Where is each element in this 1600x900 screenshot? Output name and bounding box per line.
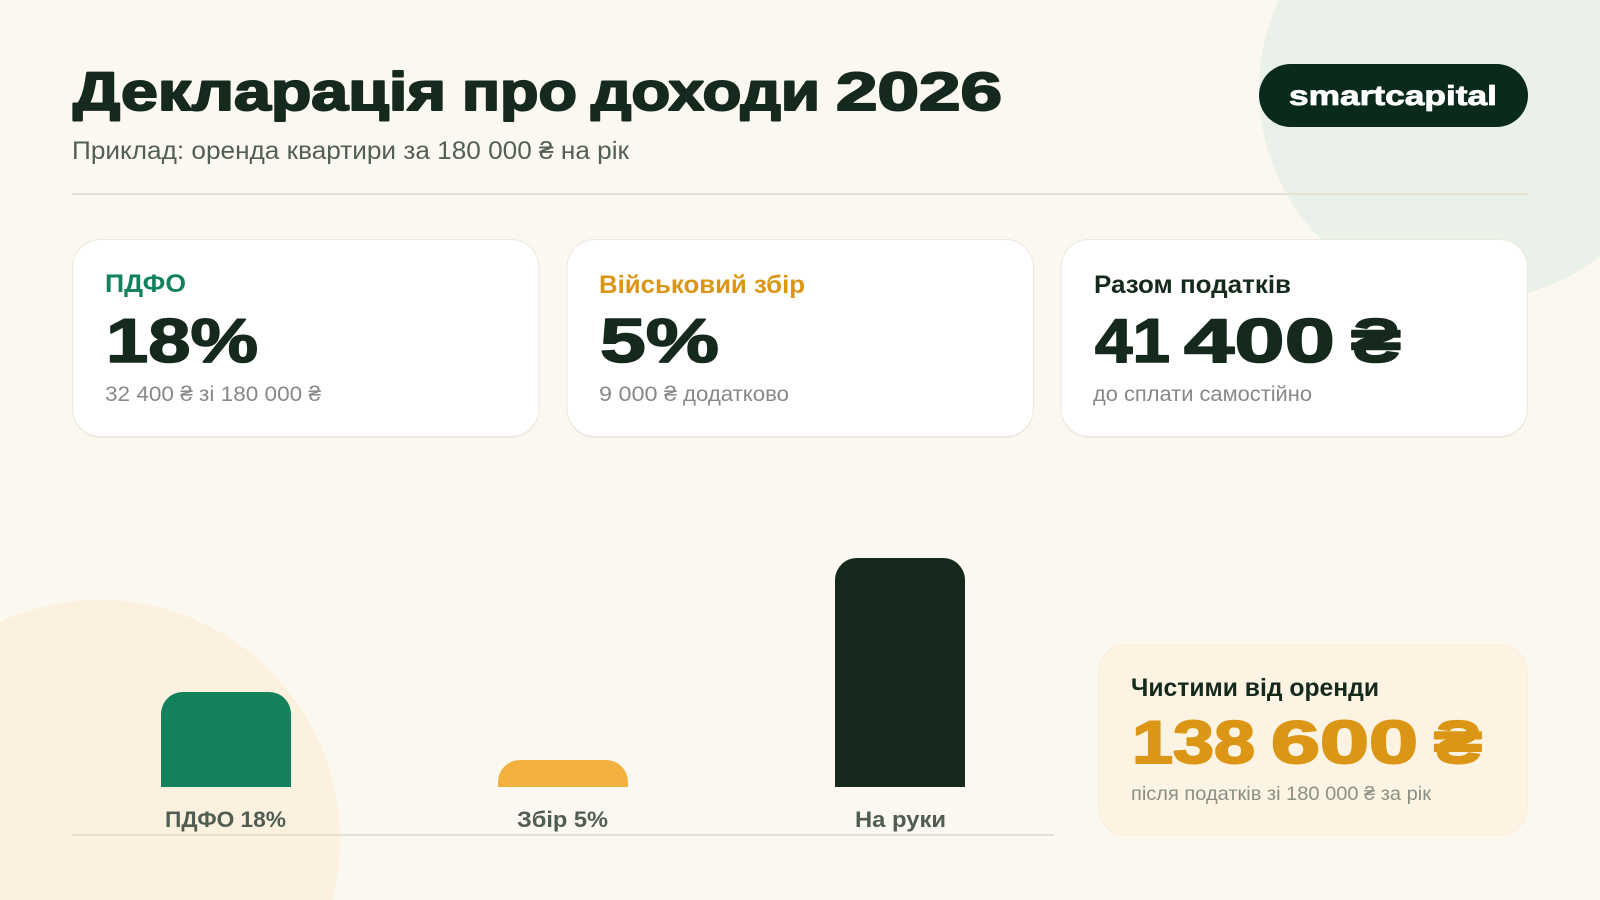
bar label: На руки: На руки bbox=[855, 807, 946, 832]
note: до сплати: до сплати самостійно bbox=[1093, 382, 1312, 406]
value: 138 600: ₴ bbox=[1434, 709, 1482, 776]
note: 9 000: 9 000 ₴ bbox=[599, 382, 677, 406]
label: Військовий збір: Військовий збір bbox=[599, 271, 805, 299]
note: після податків: після податків зі 180 000 ₴ за рік bbox=[1131, 783, 1431, 805]
label: Чистими від оренди: Чистими від оренди bbox=[1131, 674, 1379, 702]
note: 9 000: додатково bbox=[683, 382, 789, 406]
value: 5%: 5% bbox=[600, 307, 719, 376]
value: 138 600 bbox=[1132, 709, 1482, 776]
bar: ПДФО 18% bbox=[161, 692, 291, 787]
logo pill bbox=[1259, 64, 1528, 127]
bar: На руки bbox=[835, 558, 965, 787]
bar label: Збір 5%: Збір 5% bbox=[517, 807, 608, 832]
value: 41 400: 41 bbox=[1095, 307, 1170, 376]
bar label: ПДФО 18%: ПДФО 18% bbox=[165, 807, 286, 832]
note: 32 400: 32 400 ₴ зі 180 000 ₴ bbox=[105, 382, 321, 406]
bar: Збір 5% bbox=[498, 760, 628, 787]
value: 41 400 bbox=[1095, 307, 1401, 376]
subtitle: Приклад: оренда квартири за 180 000 ₴ на рік bbox=[72, 137, 630, 165]
title: Декларація bbox=[73, 62, 446, 122]
panel: Разом податків bbox=[1061, 240, 1528, 438]
panel: ПДФО bbox=[72, 240, 539, 438]
label: ПДФО: ПДФО bbox=[105, 270, 186, 298]
title bbox=[73, 62, 1002, 122]
value: 41 400: ₴ bbox=[1351, 307, 1401, 376]
panel: Чистими від оренди bbox=[1098, 644, 1528, 836]
title: 2026 bbox=[836, 62, 1002, 122]
value: 138 600: 600 bbox=[1271, 709, 1418, 776]
panel: Військовий збір bbox=[567, 240, 1034, 438]
note: 9 000 bbox=[599, 382, 789, 406]
title: доходи bbox=[591, 62, 820, 122]
decorative circle: bottom left bbox=[0, 600, 340, 900]
value: 41 400: 400 bbox=[1184, 307, 1335, 376]
label: Разом податків: Разом податків bbox=[1094, 271, 1291, 299]
value: 18%: 18% bbox=[106, 307, 258, 376]
value: 138 600: 138 bbox=[1132, 709, 1255, 776]
decorative circle: top right bbox=[1259, 0, 1600, 301]
logo pill: smartcapital bbox=[1289, 80, 1497, 111]
title: про bbox=[462, 62, 577, 122]
bar chart bbox=[72, 558, 1054, 836]
